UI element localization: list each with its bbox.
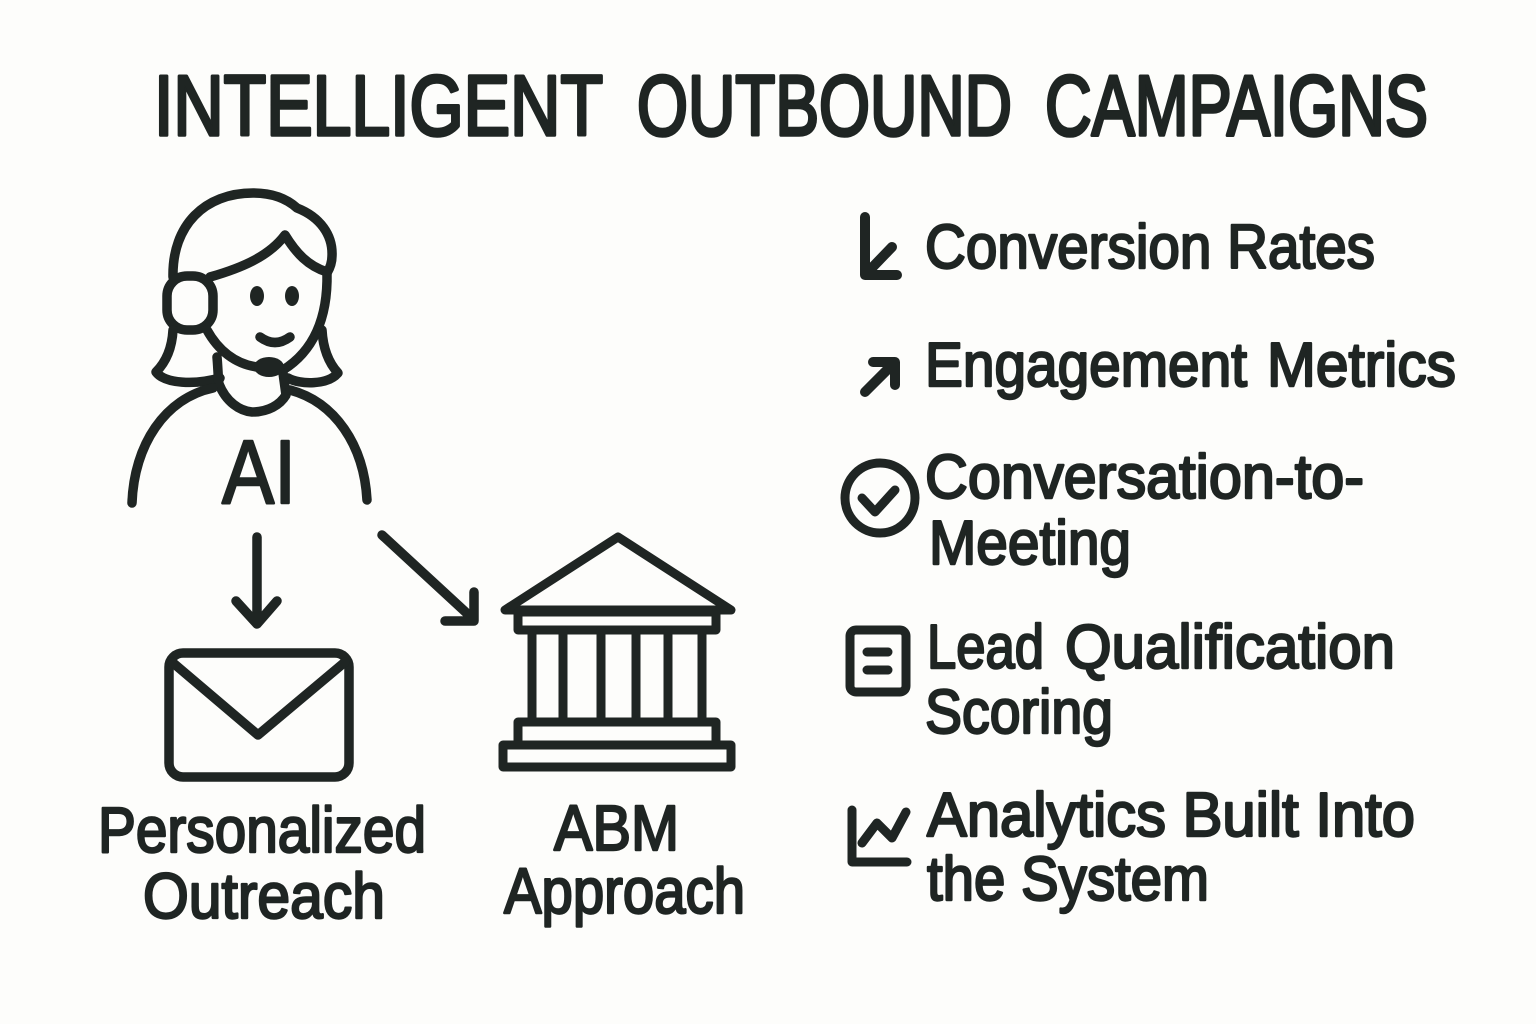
- label: ABM Approach: Approach: [504, 855, 745, 927]
- icon: check circle: [845, 463, 915, 533]
- metric: Engagement Metrics: Engagement: [925, 331, 1247, 400]
- title: OUTBOUND: [637, 59, 1012, 154]
- panel: metrics list: [845, 213, 1456, 914]
- title: INTELLIGENT: [154, 59, 603, 154]
- arrow: down to outreach: [236, 537, 277, 624]
- metric: Engagement Metrics: Metrics: [1267, 331, 1456, 400]
- title: [154, 59, 1428, 154]
- label: Personalized Outreach: Personalized: [98, 794, 426, 866]
- metric: Analytics Built Into the System: Analytics Built Into: [927, 781, 1415, 850]
- icon: envelope: [169, 653, 349, 777]
- metric: Analytics Built Into the System: [927, 781, 1415, 914]
- metric: Engagement Metrics: [925, 331, 1456, 400]
- metric: Lead Qualification Scoring: [925, 613, 1395, 747]
- label: Personalized Outreach: Outreach: [143, 860, 385, 932]
- icon: down arrow: [865, 217, 897, 275]
- icon: eyes, mic: [250, 286, 299, 377]
- metric: Lead Qualification Scoring: Qualification: [1065, 613, 1395, 682]
- metric: Analytics Built Into the System: the System: [927, 845, 1209, 914]
- metric: Lead Qualification Scoring: Lead: [927, 613, 1044, 682]
- icon: bank building: [503, 537, 731, 767]
- title: CAMPAIGNS: [1045, 59, 1428, 154]
- arrow: diagonal to ABM: [382, 535, 474, 621]
- icon: scoring card: [850, 630, 906, 692]
- metric: Conversion Rates: Conversion Rates: [925, 213, 1375, 282]
- metric: Conversation-to-Meeting: [925, 443, 1364, 578]
- label: Personalized Outreach: [98, 794, 426, 932]
- icon: analytics chart: [852, 810, 907, 862]
- label: ABM Approach: ABM: [554, 792, 679, 864]
- icon: up arrow: [865, 362, 895, 392]
- label: ABM Approach: [504, 792, 745, 927]
- panel: AI agent and outreach flow: [98, 193, 745, 932]
- metric: Conversation-to-Meeting: Meeting: [929, 509, 1131, 578]
- metric: Conversation-to-Meeting: Conversation-to-: [925, 443, 1364, 512]
- AI label: AI: [222, 423, 296, 523]
- icon: AI agent with headset: [132, 193, 367, 503]
- metric: Lead Qualification Scoring: Scoring: [925, 678, 1113, 747]
